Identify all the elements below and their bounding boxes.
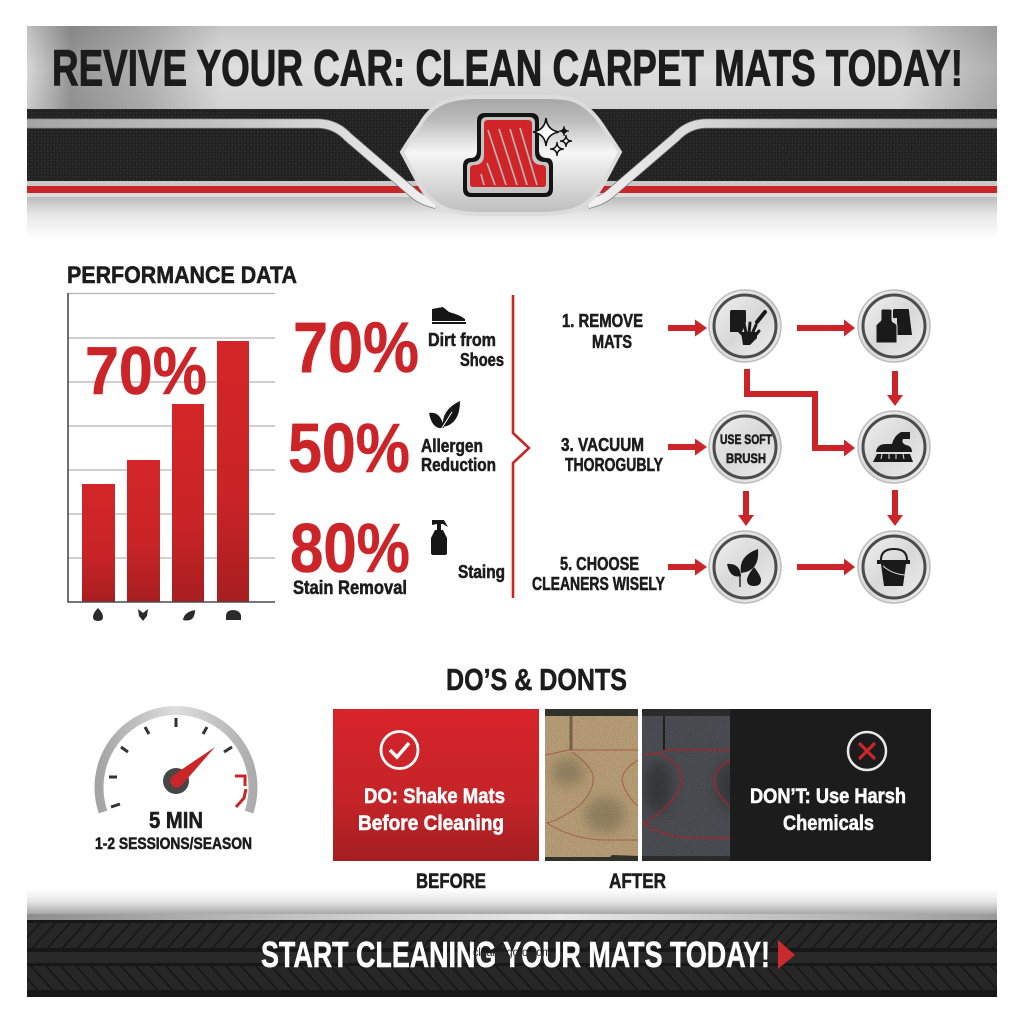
panel: do xyxy=(333,709,539,861)
divider with chevron xyxy=(513,295,529,598)
circle: remove mats hand xyxy=(709,290,781,362)
red accent stripe xyxy=(27,181,997,239)
circle: use soft brush: BRUSH xyxy=(726,450,766,466)
icon: shoe xyxy=(432,307,466,324)
step 1 label xyxy=(562,311,643,352)
icon: spray bottle xyxy=(431,520,448,555)
step labels xyxy=(532,311,665,594)
footer silver edge xyxy=(27,889,997,920)
carbon fibre band xyxy=(27,109,997,181)
don't text: Chemicals xyxy=(783,812,874,835)
step 5 label xyxy=(532,554,665,594)
step 5 label: 5. CHOOSE xyxy=(560,554,639,574)
stat: 50% allergen reduction: 50% xyxy=(288,409,410,487)
do text xyxy=(358,785,505,835)
stat: 80% stain removal xyxy=(290,509,505,599)
gauge value: 5 MIN xyxy=(149,807,203,833)
photo caption: after: AFTER xyxy=(609,870,666,893)
footer tread band xyxy=(27,920,997,997)
do text: DO: Shake Mats xyxy=(364,785,505,808)
icon: check mark xyxy=(381,732,418,768)
panel: don't xyxy=(730,709,931,861)
step 3 label: 3. VACUUM xyxy=(561,435,644,455)
circle: bucket xyxy=(858,531,930,603)
stat: 70% dirt from shoes xyxy=(293,307,504,388)
call to action: START CLEANING YOUR MATS TODAY! xyxy=(261,934,770,975)
footer banner xyxy=(27,889,997,997)
step 1 label: MATS xyxy=(592,332,632,352)
icon: sparkles xyxy=(533,118,572,156)
stat: 80% stain removal: Stain Removal xyxy=(293,578,407,599)
heading: performance data: PERFORMANCE DATA xyxy=(67,262,297,289)
step 1 label: 1. REMOVE xyxy=(562,311,643,331)
stat: 50% allergen reduction xyxy=(288,401,496,487)
stat: 80% stain removal: Staing xyxy=(458,562,505,582)
circle: scrub brush xyxy=(858,411,930,483)
stat: 50% allergen reduction: Allergen xyxy=(421,436,483,456)
stat: 50% allergen reduction: Reduction xyxy=(421,455,496,475)
gauge: time per session xyxy=(95,711,253,853)
photo: after mat xyxy=(642,709,737,861)
circle: use soft brush xyxy=(709,411,781,483)
stat: 70% dirt from shoes: 70% xyxy=(293,309,419,388)
chrome swoop lines xyxy=(27,124,997,204)
stat: 80% stain removal: 80% xyxy=(290,509,410,587)
header banner xyxy=(27,26,997,239)
photo: before mat xyxy=(545,709,638,861)
circle: use soft brush: USE SOFT xyxy=(720,431,772,447)
silver title plate xyxy=(27,26,997,110)
chart overlay value: 70% xyxy=(85,333,207,409)
icon: cross mark xyxy=(848,732,886,770)
icon: red carpet mat xyxy=(463,113,553,197)
arrow: call to action xyxy=(778,940,795,969)
step 3 label xyxy=(561,435,663,475)
step 5 label: CLEANERS WISELY xyxy=(532,574,665,594)
bars xyxy=(82,341,249,602)
watermark: cleaningoro.com xyxy=(473,945,551,959)
don't text xyxy=(750,785,906,835)
circle: leaf and drop xyxy=(709,531,781,603)
gauge caption: 1-2 SESSIONS/SEASON xyxy=(95,834,252,853)
stat: 70% dirt from shoes: Dirt from xyxy=(428,330,496,350)
process arrows xyxy=(668,320,903,576)
chrome badge xyxy=(402,97,620,214)
circle: two mats xyxy=(858,290,930,362)
photo caption: before: BEFORE xyxy=(416,870,486,893)
step 3 label: THOROGUBLY xyxy=(565,455,663,475)
bar chart xyxy=(68,293,275,621)
heading: do's and donts: DO’S & DONTS xyxy=(446,662,627,697)
icon: leaves xyxy=(429,401,460,431)
gauge needle xyxy=(163,747,215,794)
do text: Before Cleaning xyxy=(358,812,504,835)
chart axis icons xyxy=(93,608,241,621)
stat: 70% dirt from shoes: Shoes xyxy=(460,350,504,370)
don't text: DON’T: Use Harsh xyxy=(750,785,906,808)
gauge dial xyxy=(99,711,253,812)
